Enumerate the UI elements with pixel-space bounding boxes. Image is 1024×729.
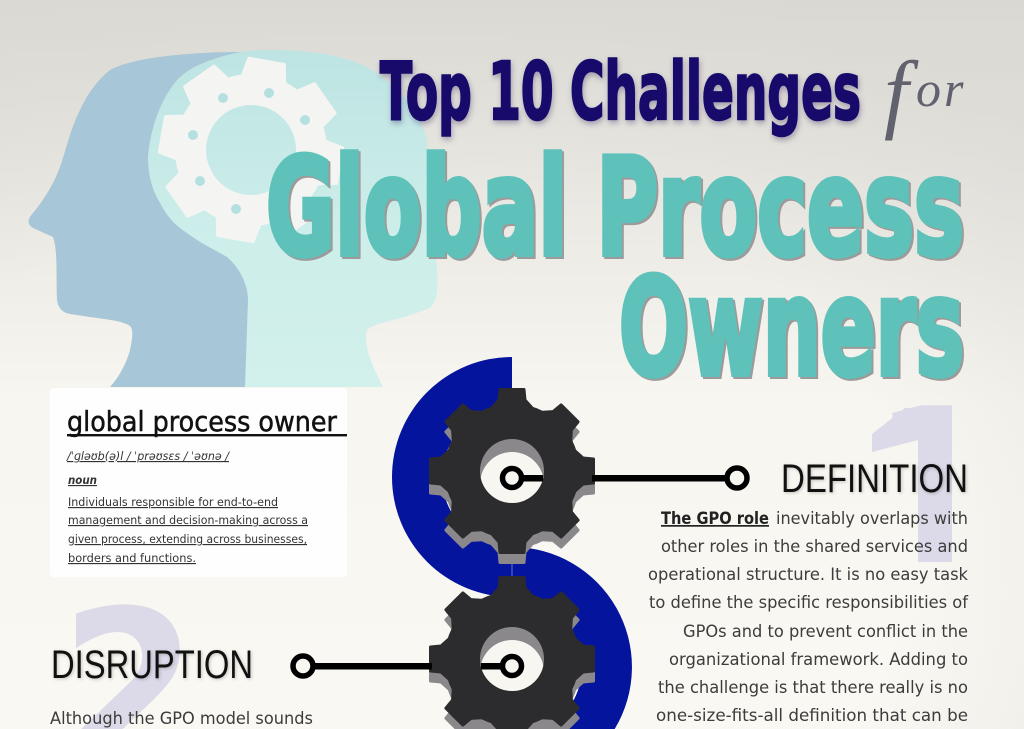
number 1 watermark: 1 bbox=[873, 362, 993, 613]
icon: white brain gear bbox=[147, 46, 355, 254]
definition text: given process, extending across businesses, bbox=[68, 532, 307, 546]
section 1 body text: other roles in the shared services and bbox=[661, 537, 968, 557]
section 1 body text bbox=[648, 509, 969, 726]
section 2 body text: Although the GPO model sounds bbox=[50, 709, 313, 729]
section 1 body text: The GPO role bbox=[661, 509, 769, 529]
section 1 body text: the challenge is that there really is no bbox=[658, 678, 968, 698]
definition text: Individuals responsible for end-to-end bbox=[68, 495, 278, 509]
gear bolt holes bbox=[188, 88, 310, 214]
section 1 body text: to define the specific responsibilities of bbox=[649, 593, 969, 613]
title: script word for: or bbox=[916, 61, 966, 117]
connector: gear 1 to definition bbox=[502, 468, 747, 488]
section 1 body text: GPOs and to prevent conflict in the bbox=[683, 622, 968, 642]
definition text: borders and functions. bbox=[68, 551, 196, 565]
part of speech: noun bbox=[68, 473, 97, 487]
card heading: global process owner bbox=[67, 405, 337, 438]
definition text: management and decision-making across a bbox=[68, 513, 308, 527]
title: script word for: f bbox=[884, 45, 919, 142]
connector: gear 2 to disruption bbox=[293, 656, 522, 676]
section 1 heading: DEFINITION bbox=[781, 457, 968, 501]
icon: gear 2 bbox=[430, 578, 594, 729]
number 1 watermark bbox=[872, 405, 952, 562]
heading underline bbox=[67, 434, 347, 436]
phonetic spelling: /ˈɡləʊb(ə)l / ˈprəʊsɛs / ˈəʊnə / bbox=[66, 449, 230, 463]
section 1 body text: inevitably overlaps with bbox=[776, 509, 968, 529]
illustration: two head silhouettes with gear bbox=[28, 46, 437, 387]
head silhouette: teal bbox=[148, 50, 437, 387]
definition text bbox=[68, 495, 308, 565]
section 1 body text: one-size-fits-all definition that can be bbox=[656, 706, 968, 726]
head silhouette: blue bbox=[28, 52, 250, 387]
section 2 heading: DISRUPTION bbox=[51, 643, 253, 687]
panel: dictionary definition card bbox=[50, 388, 347, 577]
section 1 body text: operational structure. It is no easy task bbox=[648, 565, 968, 585]
icon: gear 1 bbox=[430, 390, 594, 562]
chart: blue S connector bbox=[392, 357, 632, 729]
section 1 body text: organizational framework. Adding to bbox=[669, 650, 968, 670]
